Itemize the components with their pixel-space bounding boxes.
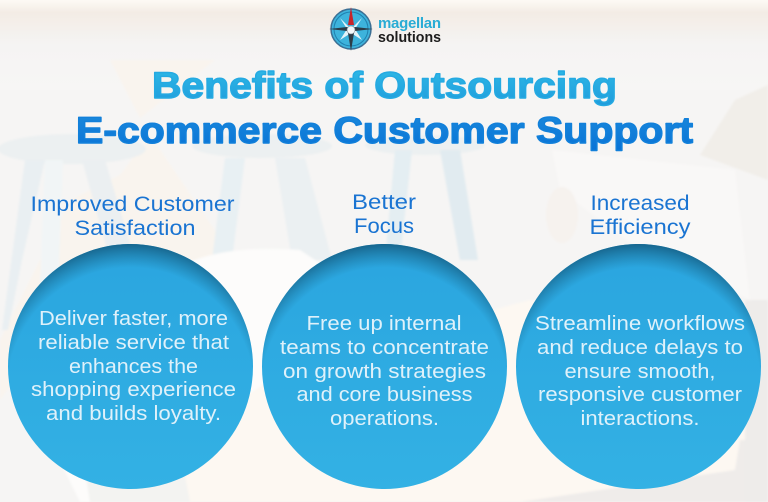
- body text: teams to concentrate: [280, 337, 489, 359]
- title: [76, 65, 693, 151]
- panel: increased efficiency: [516, 192, 761, 489]
- logo wordmark: solutions: [378, 29, 441, 46]
- logo wordmark: magellan: [378, 15, 441, 32]
- body text: Deliver faster, more: [39, 308, 228, 330]
- body text: shopping experience: [31, 379, 236, 401]
- body text: responsive customer: [538, 384, 742, 406]
- heading: Efficiency: [590, 216, 691, 239]
- body text: ensure smooth,: [564, 361, 716, 383]
- heading: [590, 192, 691, 239]
- logo: Magellan Solutions: [329, 7, 441, 51]
- body text: and builds loyalty.: [46, 403, 221, 425]
- circle: [262, 244, 507, 489]
- heading: [352, 191, 416, 238]
- heading: Improved Customer: [30, 193, 234, 216]
- title: Benefits of Outsourcing: [152, 65, 617, 106]
- heading: [30, 193, 234, 240]
- body text: on growth strategies: [283, 361, 486, 383]
- body text: [280, 313, 489, 430]
- heading: Satisfaction: [74, 217, 196, 240]
- panel: better focus: [262, 191, 507, 489]
- body text: interactions.: [580, 408, 700, 430]
- circle: [8, 244, 253, 489]
- title: E-commerce Customer Support: [76, 110, 693, 151]
- body text: and core business: [296, 384, 472, 406]
- body text: operations.: [330, 408, 439, 430]
- heading: Increased: [590, 192, 690, 215]
- panel: improved customer satisfaction: [8, 193, 253, 489]
- body text: Streamline workflows: [535, 313, 745, 335]
- body text: enhances the: [69, 356, 198, 378]
- logo wordmark: [378, 15, 441, 46]
- circle: [516, 244, 761, 489]
- body text: reliable service that: [38, 332, 229, 354]
- icon: compass: [329, 7, 373, 51]
- heading: Focus: [354, 215, 414, 238]
- body text: [535, 313, 745, 430]
- body text: [31, 308, 236, 425]
- body text: and reduce delays to: [537, 337, 743, 359]
- heading: Better: [352, 191, 416, 214]
- body text: Free up internal: [306, 313, 462, 335]
